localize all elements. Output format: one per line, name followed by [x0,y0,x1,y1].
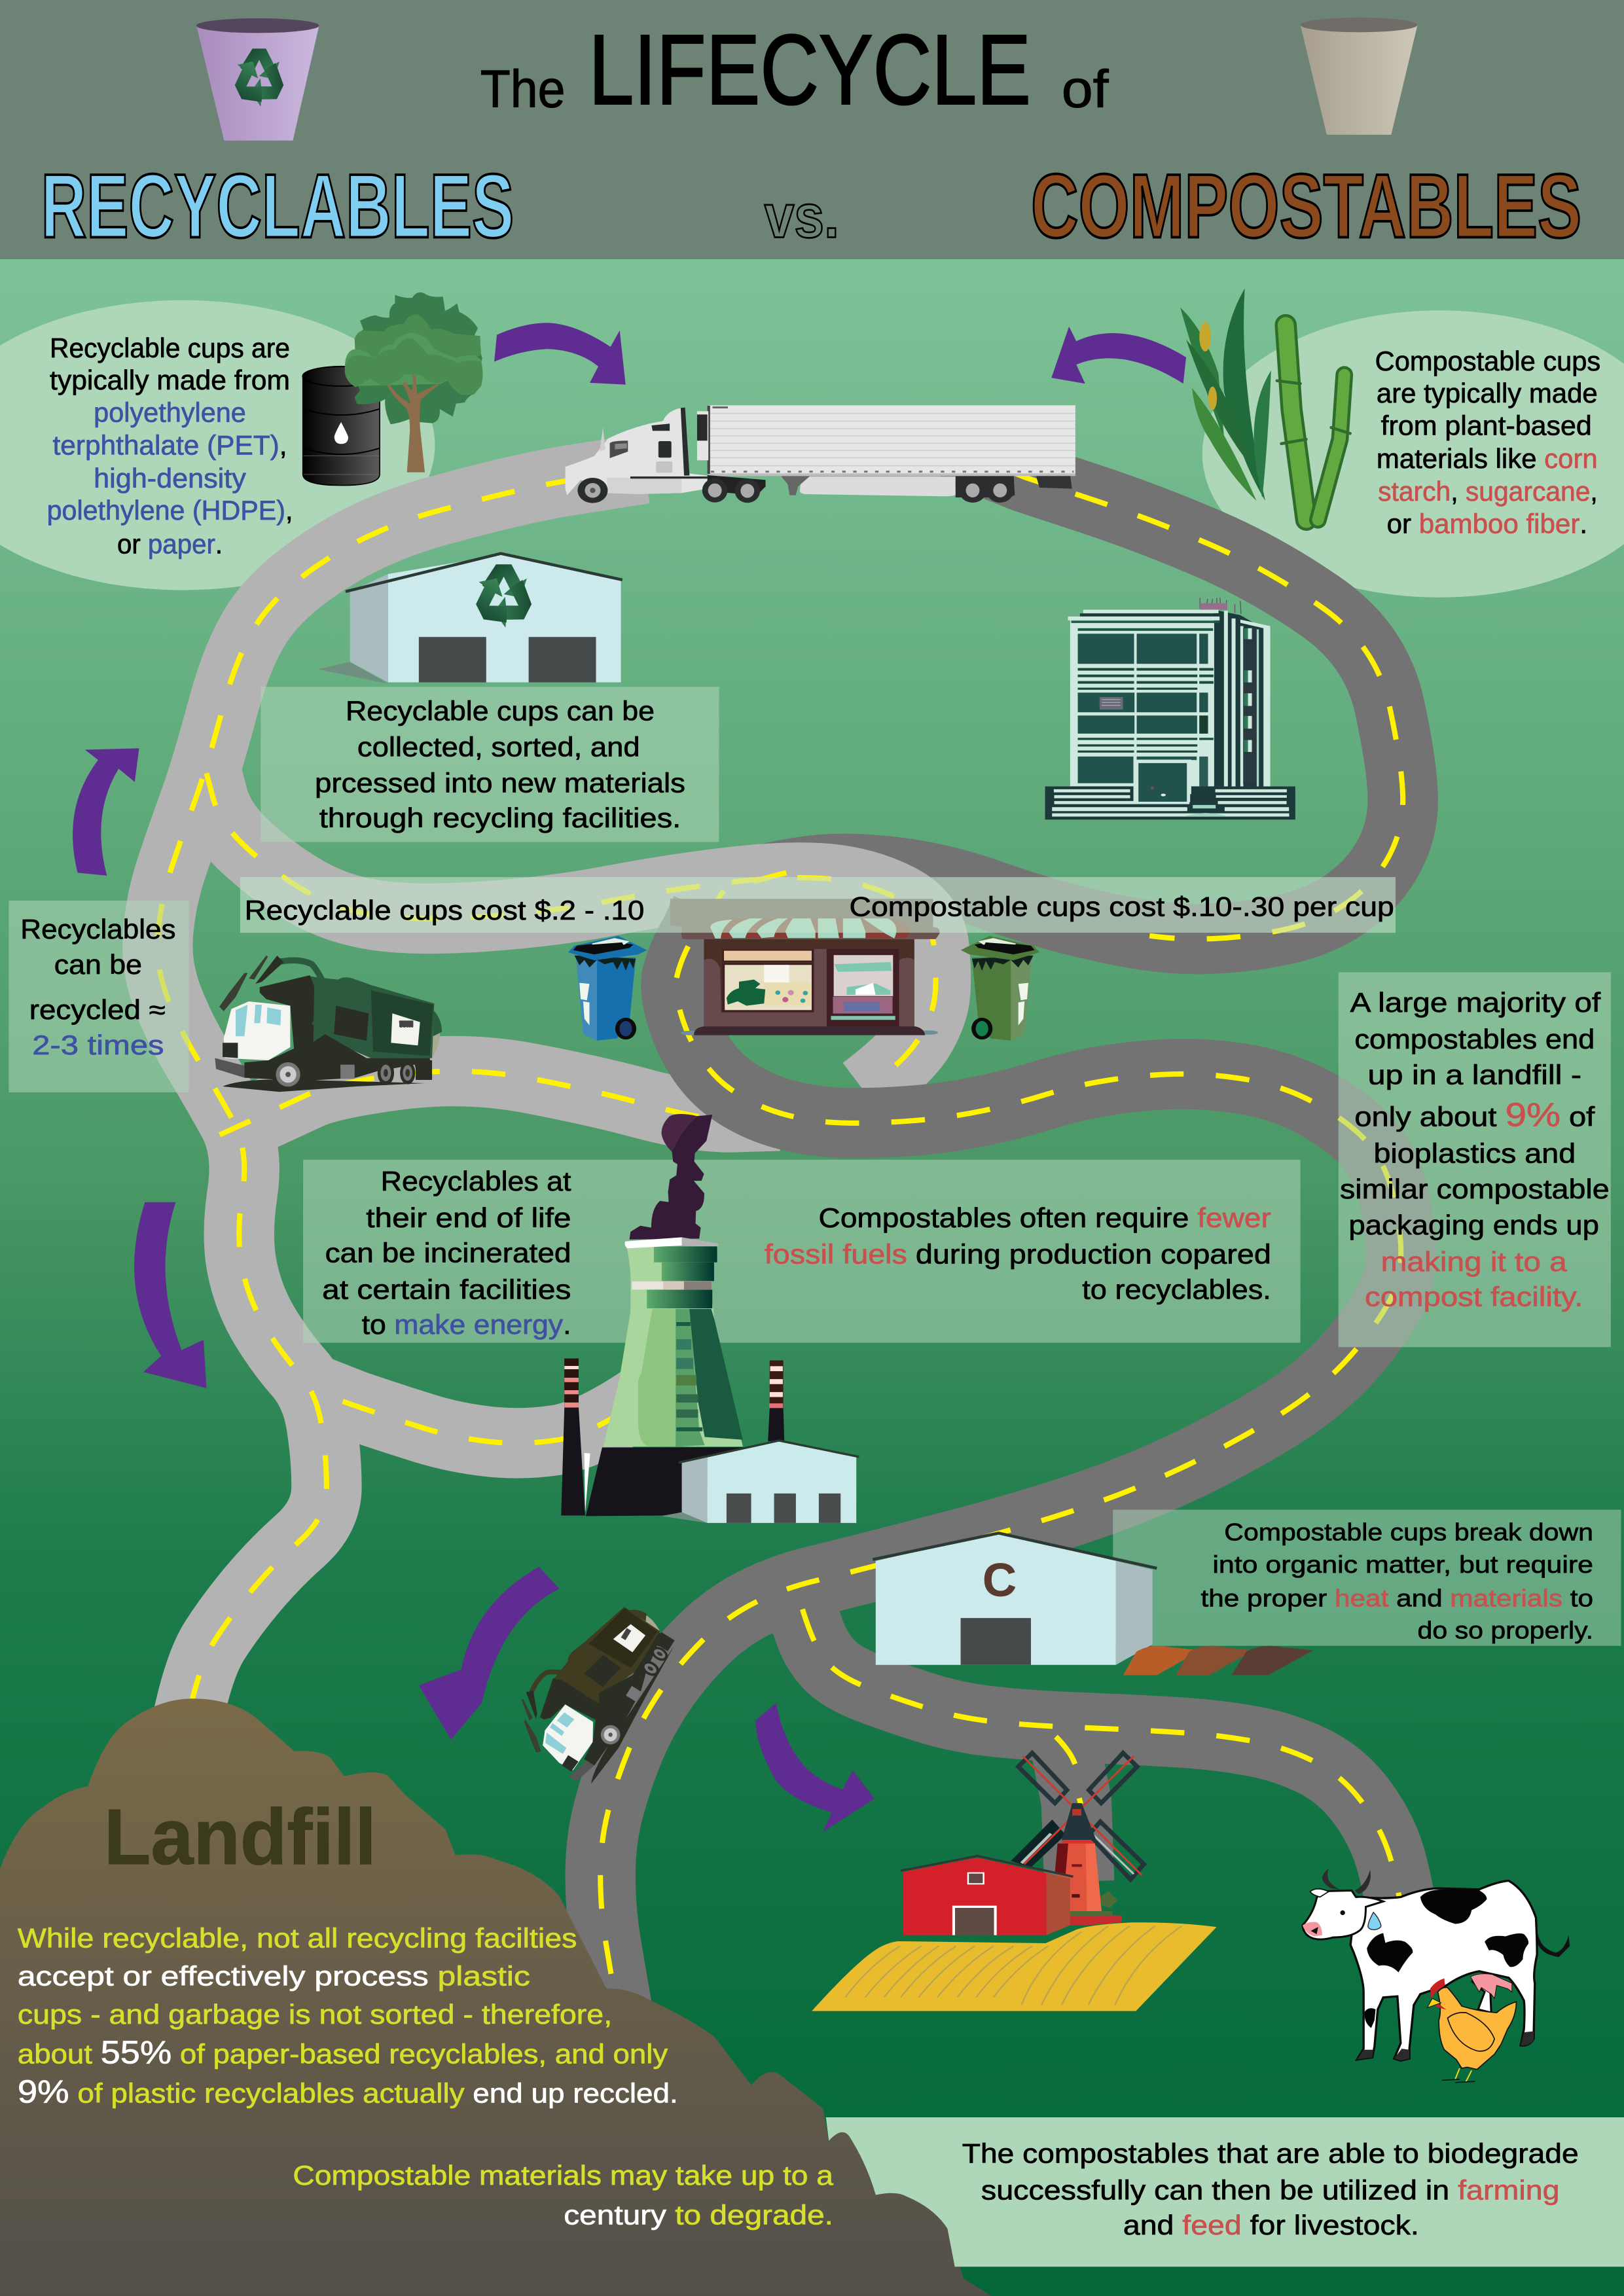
panel: end of life and fossil fuels: their end of life [366,1203,571,1233]
panel: recyclable cups made from [47,333,293,560]
icon: shop [670,899,939,1035]
road: compostable lower section [600,872,1406,2013]
heading: vs: vs. [765,181,839,250]
panel: recyclable cups made from: polethylene (HDPE), [47,495,293,526]
icon: tilted garbage truck [500,1581,687,1791]
panel: compost landfill statistic: making it to a [1381,1247,1568,1277]
icon: chicken [1427,1979,1516,2083]
icon: landfill mound [0,1698,992,2296]
icon: wheat field [812,1922,1217,2011]
panel: compost uses: and feed for livestock. [1123,2210,1419,2240]
panel: compost landfill statistic: compost facility. [1365,1282,1583,1312]
arrow: recyclables down [134,1202,206,1388]
icon: windmill and farm [812,1753,1217,2011]
heading: recyclables: RECYCLABLES [41,155,514,257]
icon: office building [1045,598,1295,819]
panel: times recycled: can be [54,950,142,980]
text: compostable degradation: Compostable materials may take up to a [293,2161,834,2191]
heading: landfill: Landfill [104,1793,376,1881]
panel: times recycled [9,901,189,1092]
text: landfill explanation: While recyclable, not all recycling facilties [18,1924,577,1954]
panel: compost landfill statistic: bioplastics and [1373,1138,1576,1168]
arrow: truck to landfill [419,1567,560,1740]
panel: compostable cups made from: starch, sugarcane, [1378,476,1598,507]
icon: corn plant [1180,289,1271,501]
panel: end of life and fossil fuels: to recyclables. [1082,1274,1271,1304]
panel: recyclable cups made from: Recyclable cups are [50,333,290,363]
panel: recycling facilities: through recycling facilities. [319,803,681,833]
icon: recycling warehouse [317,554,623,684]
panel: composting conditions: the proper heat and materials to [1200,1585,1593,1611]
panel: compostable cups made from: from plant-based [1381,410,1592,440]
icon: recyclable cup [196,18,319,141]
panel: end of life and fossil fuels: can be incinerated [325,1238,571,1268]
icon: garbage truck [215,956,442,1092]
panel: composting conditions [1113,1510,1621,1646]
panel: compost uses: The compostables that are able to biodegrade [962,2138,1579,2168]
text: landfill explanation [18,1924,678,2110]
panel: end of life and fossil fuels: Compostables often require fewer [819,1203,1271,1233]
text: landfill explanation: cups - and garbage is not sorted - therefore, [18,2000,612,2030]
panel: recyclable cups made from: terphthalate (PET) , [53,431,287,461]
panel: compost landfill statistic: only about 9% of [1354,1095,1595,1133]
panel: end of life and fossil fuels: Recyclables at [381,1166,571,1196]
icon: green bin [961,936,1039,1041]
icon: blue bin [568,936,647,1041]
icon: soil piles [1123,1646,1314,1675]
panel: end of life and fossil fuels: fossil fuels during production copared [765,1240,1271,1270]
text: compostable degradation [293,2161,834,2230]
panel: compost landfill statistic: packaging ends up [1348,1210,1599,1240]
panel: cost comparison [240,877,1396,933]
panel: recyclable cups made from: typically made from [50,365,290,395]
title: LIFECYCLE [588,14,1031,126]
panel: compostable cups made from: materials like corn [1377,444,1598,474]
panel: times recycled: recycled ≈ [29,995,166,1025]
panel: compost uses [826,2117,1624,2267]
panel: compost landfill statistic: up in a landfill - [1367,1060,1581,1090]
text: landfill explanation: accept or effectively process plastic [18,1962,530,1992]
panel: compostable cups made from: are typically made [1377,378,1598,408]
panel: compostable cups made from: Compostable cups [1375,346,1600,376]
title: The [480,60,566,118]
panel: end of life and fossil fuels: at certain facilities [322,1274,571,1304]
panel: composting conditions: into organic matter, but require [1212,1551,1593,1578]
icon: tree [345,293,483,473]
icon: smoke plume [630,1114,712,1240]
icon: semi truck [566,405,1075,503]
panel: cost comparison: Compostable cups cost $.10-.30 per cup [850,891,1394,922]
panel: compost landfill statistic: compostables end [1354,1024,1595,1054]
panel: recyclable cups made from: polyethylene [94,397,246,427]
panel: end of life and fossil fuels [303,1160,1301,1343]
header band [0,0,1624,259]
panel: compost landfill statistic: A large majority of [1350,988,1601,1018]
road: compostable upper section [725,448,1403,939]
arrow: materials to truck right [1051,327,1186,384]
panel: compostable materials bubble shape [1202,310,1624,598]
text: compostable degradation: century to degrade. [564,2200,833,2230]
panel: compostable cups made from [1375,346,1600,539]
panel: times recycled: Recyclables [20,914,175,944]
panel: composting conditions: do so properly. [1418,1617,1593,1643]
title: of [1062,60,1109,118]
panel: recycling facilities [261,687,719,842]
panel: recyclable cups made from: or paper. [117,529,223,560]
panel: compost landfill statistic: similar compostable [1340,1174,1610,1204]
icon: compost facility [873,1533,1157,1665]
icon: oil barrel [302,367,380,486]
panel: recyclable materials bubble shape [0,300,435,590]
panel: cost comparison: Recyclable cups cost $.2 - .10 [245,895,644,925]
panel: recycling facilities: prcessed into new materials [315,768,685,798]
panel: recycling facilities: collected, sorted, and [357,732,640,762]
panel: recycling facilities: Recyclable cups can be [346,696,655,726]
arrow: recycled loop up [73,748,139,876]
panel: end of life and fossil fuels: to make energy . [362,1310,571,1340]
icon: compost facility: C [983,1554,1017,1607]
icon: barn [901,1856,1073,1935]
arrow: compost to farm [755,1703,875,1832]
panel: recyclable cups made from: high-density [94,463,246,493]
road: recyclable main [158,469,936,1721]
arrow: materials to truck left [494,323,626,385]
text: landfill explanation: about 55% of paper-based recyclables, and only [18,2034,668,2070]
panel: times recycled: 2-3 times [32,1030,164,1060]
panel: composting conditions: Compostable cups break down [1224,1519,1593,1546]
panel: compost landfill statistic [1339,973,1611,1347]
panel: compostable cups made from: or bamboo fiber. [1387,509,1587,539]
icon: cow [1303,1869,1570,2060]
icon: garbage truck: WM [399,1019,413,1030]
icon: power plant [561,1114,859,1523]
icon: windmill blades [1011,1753,1144,1880]
icon: compostable cup [1301,18,1418,135]
panel: compost uses: successfully can then be utilized in farming [981,2175,1560,2205]
text: landfill explanation: 9% of plastic recyclables actually end up reccled. [18,2074,678,2110]
icon: sugarcane [1277,325,1350,520]
